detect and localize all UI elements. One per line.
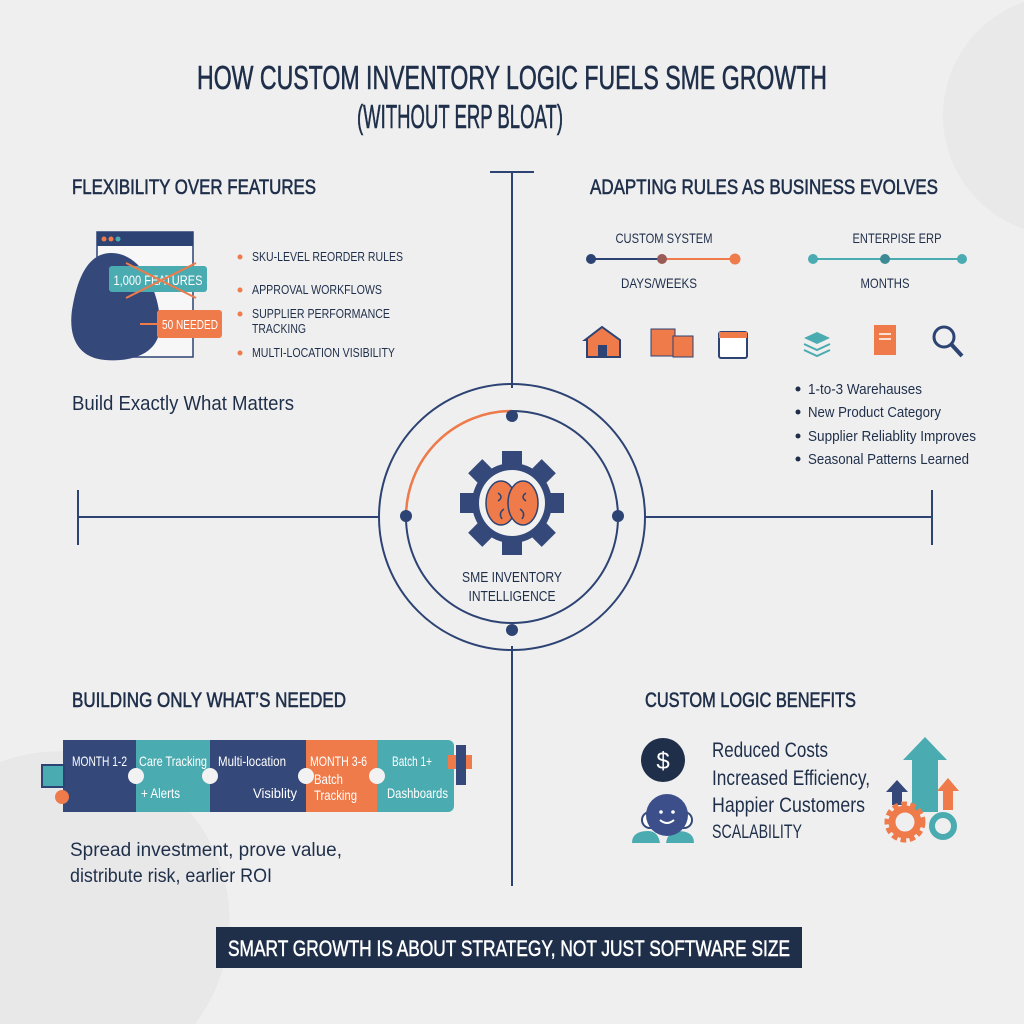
icon: growth arrows gears <box>886 737 959 838</box>
tagline: distribute risk, earlier ROI <box>70 866 272 887</box>
icon: browser with blob: 50 NEEDED <box>162 317 218 332</box>
custom system timeline: DAYS/WEEKS <box>621 275 697 291</box>
benefit text: SCALABILITY <box>712 822 802 843</box>
tagline: Build Exactly What Matters <box>72 393 294 415</box>
roadmap bar: Care Tracking <box>139 753 207 769</box>
roadmap bar: + Alerts <box>141 785 180 801</box>
icon: gear brain <box>460 451 564 555</box>
erp timeline: MONTHS <box>860 275 910 291</box>
center label: INTELLIGENCE <box>468 588 556 605</box>
bullets: SKU-LEVEL REORDER RULES <box>252 249 403 264</box>
bullet list: New Product Category <box>808 404 941 421</box>
axes lines <box>78 172 932 886</box>
roadmap bar <box>42 740 472 812</box>
banner <box>216 927 802 968</box>
icon: dollar <box>641 738 685 782</box>
icon: browser with blob: 1,000 FEATURES <box>114 272 202 288</box>
bullets: MULTI-LOCATION VISIBILITY <box>252 345 395 360</box>
roadmap bar: MONTH 3-6 <box>310 753 367 769</box>
bullets: TRACKING <box>252 321 306 336</box>
benefit text: Happier Customers <box>712 794 865 817</box>
center label: SME INVENTORY <box>462 569 562 586</box>
heading: CUSTOM LOGIC BENEFITS <box>645 689 856 712</box>
bullets <box>238 249 403 360</box>
roadmap bar: Tracking <box>314 787 357 803</box>
bullet list: Seasonal Patterns Learned <box>808 451 969 468</box>
bullet list <box>796 381 976 468</box>
bullet list: 1-to-3 Warehauses <box>808 381 922 398</box>
erp timeline: ENTERPISE ERP <box>852 230 942 246</box>
title: (WITHOUT ERP BLOAT) <box>357 98 563 135</box>
heading: BUILDING ONLY WHAT’S NEEDED <box>72 689 346 712</box>
center label <box>462 569 562 605</box>
roadmap bar: Multi-location <box>218 753 286 769</box>
roadmap bar: MONTH 1-2 <box>72 753 127 769</box>
center hub <box>379 384 645 650</box>
panel: flexibility <box>71 176 403 415</box>
custom system timeline: CUSTOM SYSTEM <box>616 230 712 246</box>
tagline: Spread investment, prove value, <box>70 840 342 861</box>
icon: happy face <box>632 794 694 843</box>
panel: adapting rules <box>585 176 976 468</box>
erp timeline <box>808 230 967 291</box>
custom system timeline <box>586 230 740 291</box>
bullets: APPROVAL WORKFLOWS <box>252 282 382 297</box>
benefit text: Reduced Costs <box>712 739 828 762</box>
roadmap bar: Batch <box>314 771 343 787</box>
heading: FLEXIBILITY OVER FEATURES <box>72 176 316 199</box>
roadmap bar: Visiblity <box>253 785 297 801</box>
benefit text <box>712 739 870 843</box>
bullet list: Supplier Reliablity Improves <box>808 428 976 445</box>
heading: ADAPTING RULES AS BUSINESS EVOLVES <box>590 176 938 199</box>
roadmap bar: Dashboards <box>387 785 448 801</box>
panel: benefits <box>632 689 959 843</box>
tagline <box>70 840 342 887</box>
banner: SMART GROWTH IS ABOUT STRATEGY, NOT JUST SOFTWARE SIZE <box>228 936 790 961</box>
panel: building only what's needed <box>42 689 472 887</box>
icon: dollar: $ <box>656 748 670 775</box>
roadmap bar: Batch 1+ <box>392 753 432 769</box>
benefit text: Increased Efficiency, <box>712 767 870 790</box>
icons row <box>585 325 962 358</box>
icon: browser with blob <box>71 232 222 360</box>
title <box>197 59 827 135</box>
bullets: SUPPLIER PERFORMANCE <box>252 306 390 321</box>
